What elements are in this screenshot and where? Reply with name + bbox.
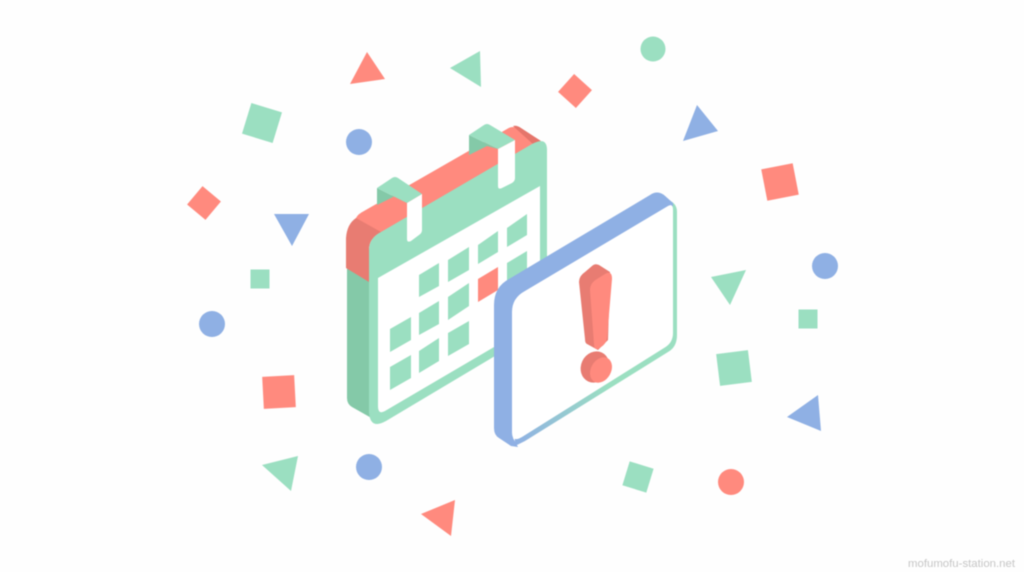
circle: mint top — [640, 36, 666, 62]
square: mint upper left — [242, 103, 282, 143]
square: red left diamond — [187, 186, 221, 220]
calendar left side — [347, 266, 382, 424]
circle: blue right — [812, 253, 838, 279]
calendar front face — [369, 141, 547, 424]
calendar red header side — [346, 218, 381, 282]
icon: calendar — [346, 124, 547, 424]
watermark: mofumofu-station.net — [908, 558, 1016, 570]
triangle: blue lower right — [787, 395, 821, 431]
circle: red bottom right — [718, 469, 744, 495]
triangle: mint right — [711, 270, 746, 305]
confetti shapes — [187, 36, 838, 536]
alert panel white face — [512, 205, 673, 439]
icon: alert panel — [494, 192, 677, 447]
square: red lower left — [262, 375, 296, 409]
triangle: blue upper right — [683, 105, 718, 141]
alert panel mint edge — [510, 200, 677, 446]
circle: blue bottom — [356, 454, 382, 480]
square: mint small left — [250, 270, 270, 288]
triangle: red bottom — [421, 500, 455, 536]
circle: blue left — [199, 311, 225, 337]
square: red right — [761, 163, 799, 201]
calendar binding ring right — [469, 124, 515, 189]
triangle: red top — [350, 52, 385, 84]
square: red top diamond — [558, 74, 592, 108]
triangle: blue left — [274, 214, 309, 246]
square: mint lower right — [716, 350, 752, 386]
triangle: mint top — [450, 51, 481, 87]
triangle: mint lower left — [262, 456, 298, 491]
exclamation mark — [576, 264, 616, 387]
calendar red marked day — [478, 267, 498, 302]
square: mint small right — [798, 310, 818, 328]
calendar red top surface — [356, 127, 541, 240]
calendar binding ring left — [377, 177, 422, 242]
circle: blue upper left — [346, 129, 372, 155]
calendar grid cells — [390, 214, 527, 390]
calendar white page — [378, 186, 540, 412]
alert panel blue frame — [494, 192, 673, 447]
square: mint bottom — [622, 461, 654, 493]
